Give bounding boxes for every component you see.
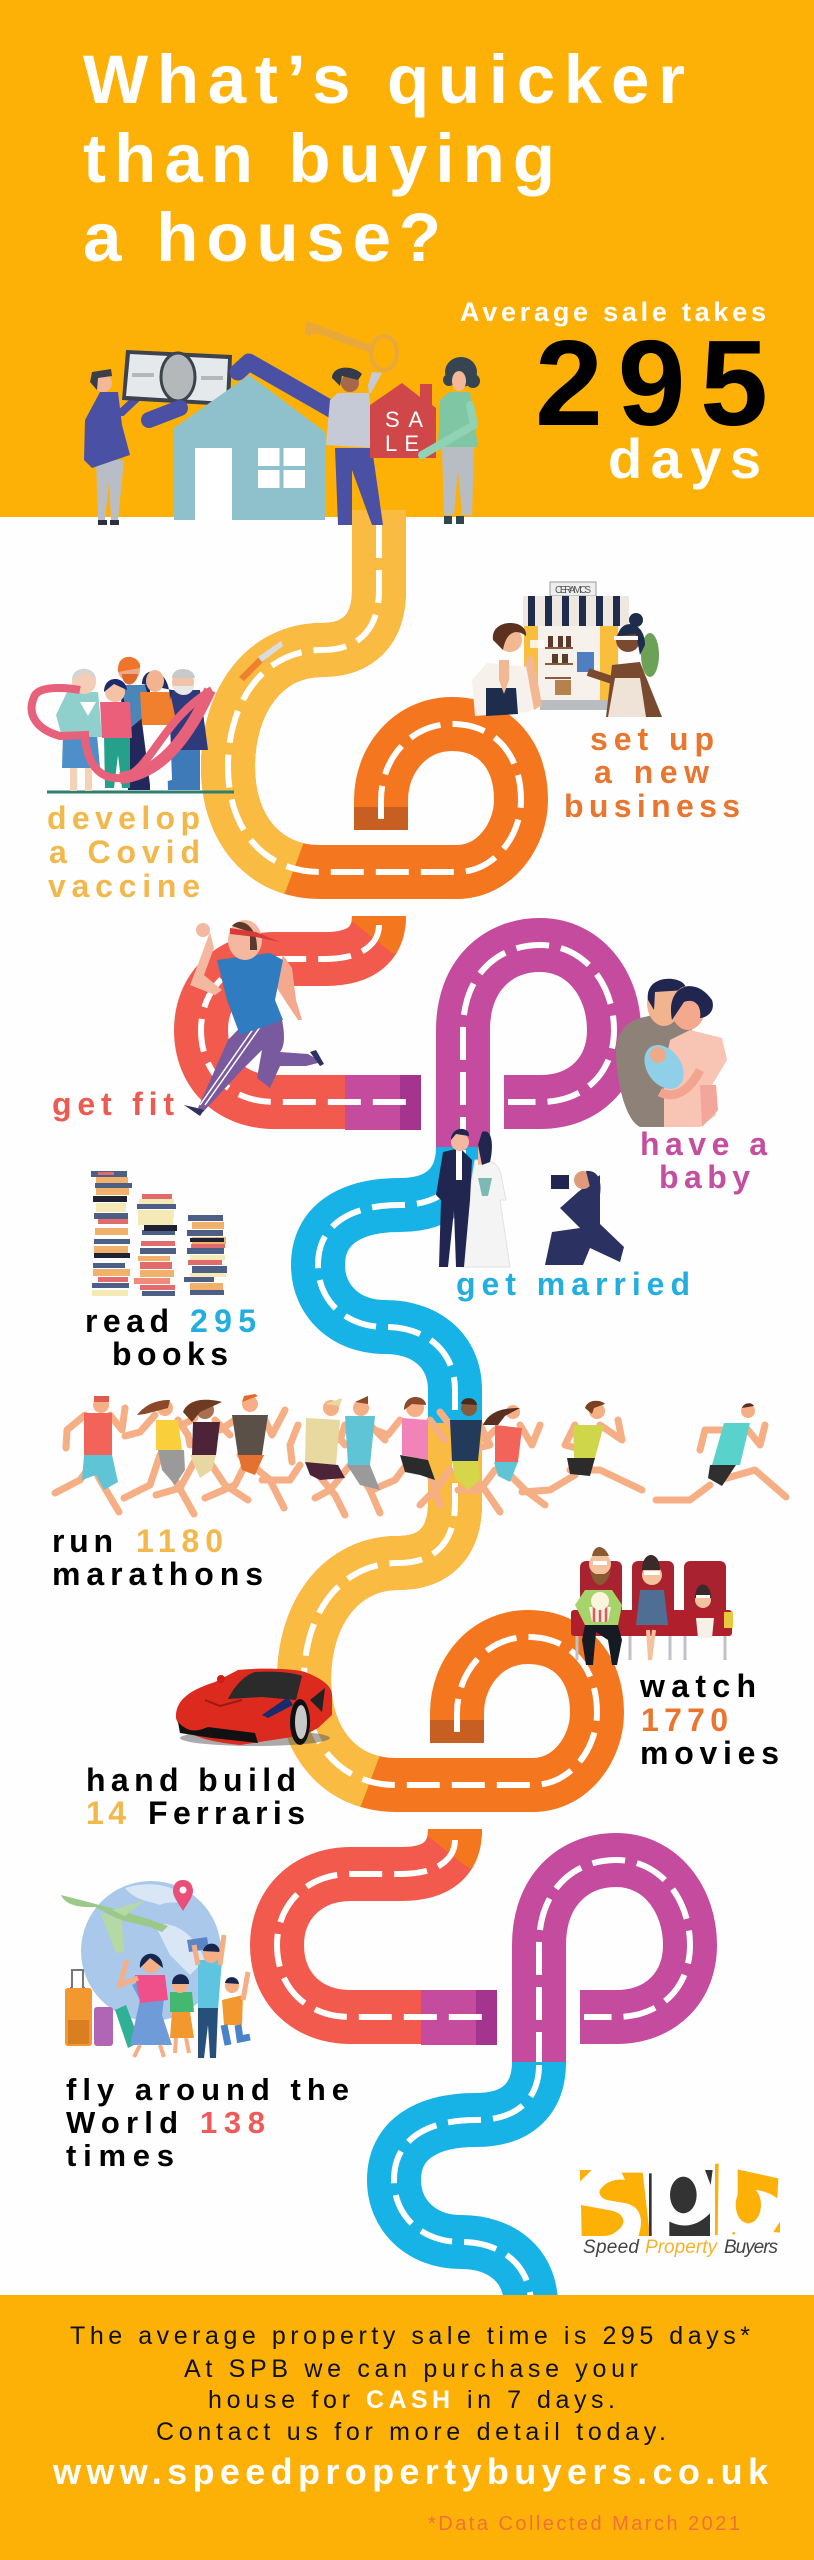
road section 2: red — [201, 916, 421, 1130]
label: read 295 books: 295 — [190, 1303, 256, 1339]
label: fly around the World 138 times: times — [66, 2138, 174, 2173]
icon: family with ribbon and syringe — [32, 641, 283, 792]
title: a house? — [83, 199, 441, 276]
label: watch 1770 movies: 1770 — [641, 1702, 728, 1738]
road section 4: blue — [318, 1147, 463, 1423]
label: run 1180 marathons: 1180 — [136, 1523, 223, 1559]
footer message: CASH — [366, 2386, 450, 2414]
label: hand build 14 Ferraris: hand build — [86, 1762, 296, 1798]
label: have a baby: have a — [640, 1126, 767, 1162]
road section 6: red — [277, 1829, 497, 2045]
logo: Speed Property Buyers: Buyers — [724, 2237, 778, 2258]
road section 1: yellow and orange — [228, 510, 521, 872]
label: fly around the World 138 times: World — [66, 2105, 178, 2140]
label: set up a new business: business — [564, 788, 740, 824]
label: develop a Covid vaccine: develop — [47, 800, 200, 836]
label: set up a new business: set up — [590, 721, 714, 757]
label: set up a new business: a new — [594, 754, 709, 790]
icon: travelling family with globe and plane — [61, 1880, 250, 2058]
label: fly around the World 138 times: 138 — [200, 2105, 265, 2140]
footer message: The average property sale time is 295 days* — [70, 2322, 750, 2350]
label: develop a Covid vaccine — [47, 800, 200, 904]
label: read 295 books — [85, 1303, 256, 1372]
label: develop a Covid vaccine: a Covid — [49, 834, 200, 870]
road section 3: purple loop — [463, 945, 614, 1150]
label: run 1180 marathons: marathons — [52, 1556, 263, 1592]
label: read 295 books: books — [112, 1336, 228, 1372]
icon: ceramics shop with two owners: CERAMICS — [555, 585, 591, 596]
icon: wedding couple and photographer — [436, 1129, 624, 1267]
icon: house with buyers and sellers — [84, 322, 480, 525]
logo: Speed Property Buyers: Speed — [583, 2237, 640, 2258]
label: watch 1770 movies: watch — [639, 1668, 756, 1704]
label: hand build 14 Ferraris — [86, 1762, 305, 1831]
average sale stat: days — [608, 427, 761, 490]
road section 5: yellow and orange — [304, 1423, 597, 1785]
icon: parents holding baby — [616, 979, 727, 1127]
icon: runner getting fit — [184, 920, 324, 1116]
logo: Speed Property Buyers: Property — [645, 2237, 718, 2258]
road section 8: blue — [394, 2062, 539, 2338]
label: read 295 books: read — [85, 1303, 169, 1339]
footer message: in 7 days. — [467, 2386, 615, 2414]
header band — [0, 0, 814, 517]
title: What’s quicker — [83, 41, 685, 118]
icon: red Ferrari — [176, 1669, 332, 1746]
icon: ceramics shop with two owners — [472, 582, 662, 717]
label: fly around the World 138 times: fly around the — [66, 2072, 349, 2107]
label: get married: get married — [456, 1266, 690, 1302]
footnote: *Data Collected March 2021 — [428, 2513, 740, 2535]
label: fly around the World 138 times — [66, 2072, 349, 2173]
footer message: Contact us for more detail today. — [156, 2418, 666, 2446]
average sale stat: Average sale takes — [460, 297, 766, 327]
label: run 1180 marathons — [52, 1523, 263, 1592]
average sale stat — [460, 297, 768, 490]
label: watch 1770 movies: movies — [640, 1735, 779, 1771]
label: have a baby: baby — [659, 1159, 750, 1195]
icon: group of marathon runners — [55, 1394, 786, 1515]
icon: family in cinema seats — [571, 1547, 733, 1665]
label: set up a new business — [564, 721, 740, 824]
footer band — [0, 2295, 814, 2560]
average sale stat: 295 — [535, 315, 768, 451]
icon: house with buyers and sellers: SA — [385, 407, 423, 432]
road section 7: purple loop — [539, 1860, 690, 2065]
footer message: house for — [208, 2386, 350, 2414]
logo: Speed Property Buyers — [580, 2163, 780, 2258]
label: hand build 14 Ferraris: 14 — [86, 1795, 126, 1831]
title — [83, 41, 685, 276]
title: than buying — [83, 120, 555, 197]
label: develop a Covid vaccine: vaccine — [48, 868, 200, 904]
icon: house with buyers and sellers: LE — [385, 431, 419, 456]
label: have a baby — [640, 1126, 767, 1195]
label: hand build 14 Ferraris: Ferraris — [148, 1795, 305, 1831]
logo mark: spb letters — [580, 2163, 780, 2236]
footer message — [70, 2322, 750, 2446]
label: get fit: get fit — [52, 1086, 174, 1122]
label: run 1180 marathons: run — [52, 1523, 113, 1559]
icon: stacks of books — [91, 1171, 227, 1296]
website address: www.speedpropertybuyers.co.uk — [52, 2451, 769, 2492]
label: watch 1770 movies — [639, 1668, 779, 1771]
footer message: At SPB we can purchase your — [184, 2355, 638, 2383]
